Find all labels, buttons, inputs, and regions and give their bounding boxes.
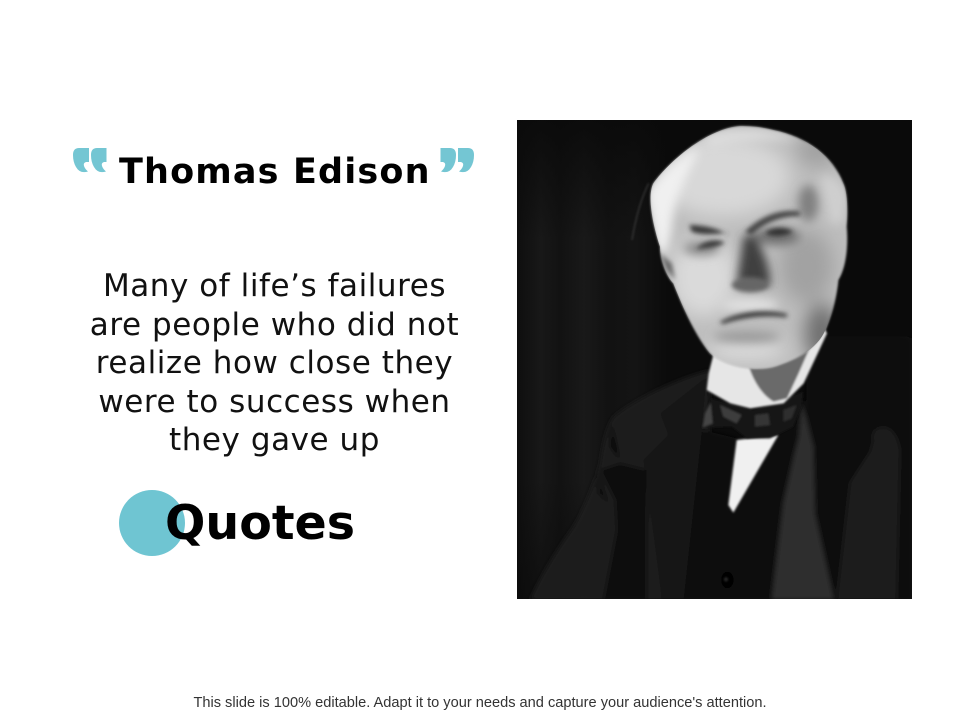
- footer note: This slide is 100% editable. Adapt it to your needs and capture your audience's attention.: [193, 695, 767, 711]
- shirt front: [728, 435, 778, 513]
- eyes: [696, 240, 725, 249]
- vest: [683, 407, 800, 600]
- heading: Thomas Edison: Thomas Edison: [119, 152, 431, 192]
- head: [647, 126, 847, 369]
- section title: Quotes: Quotes: [165, 496, 355, 551]
- temple shadow: [798, 185, 818, 222]
- left lapel: [643, 377, 707, 600]
- quote text: are people who did not: [90, 306, 459, 342]
- left sleeve: [530, 370, 710, 600]
- portrait photo of Thomas Edison: [517, 120, 912, 599]
- clothing: [530, 310, 912, 600]
- brows: [689, 225, 728, 235]
- quote text: were to success when: [98, 384, 451, 420]
- icon: opening quotation mark: [73, 148, 106, 172]
- stray hair wisps: [632, 183, 649, 240]
- mouth: [719, 311, 787, 324]
- nose shadow: [737, 233, 770, 287]
- quote text: they gave up: [169, 422, 380, 458]
- quote text: realize how close they: [96, 345, 453, 381]
- bow tie: [702, 392, 803, 438]
- top hair: [703, 130, 797, 150]
- icon: teal circle accent: [119, 490, 185, 556]
- icon: closing quotation mark: [440, 148, 474, 172]
- right coat: [803, 310, 912, 600]
- left hair: [647, 147, 700, 253]
- right hair: [820, 176, 847, 223]
- collar and neck: [707, 330, 827, 408]
- background: [517, 120, 912, 599]
- quote text: [90, 268, 459, 458]
- face tones: [657, 137, 790, 217]
- quote text: Many of life’s failures: [103, 268, 446, 304]
